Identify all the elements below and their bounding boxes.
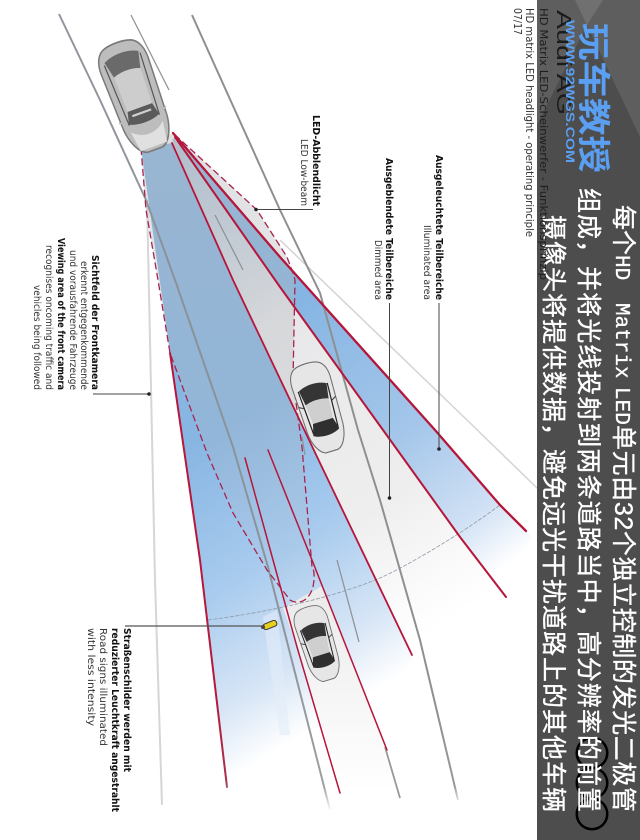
road line: left edge: [59, 14, 330, 810]
caption line 1: LED: [609, 387, 632, 425]
callout: front camera viewing area: vehicles being followed: [31, 285, 42, 390]
decorative top triangle: [575, 0, 603, 25]
range arc: [208, 505, 500, 620]
beam: pale stripe behind road sign: [263, 610, 290, 735]
header: date: 07/17: [511, 8, 523, 35]
callout: front camera viewing area: Viewing area of the front camera: [55, 238, 66, 390]
red line: upper illuminated edge: [173, 133, 526, 531]
caption line 1: 单元由32个独立控制的发光二极管: [609, 425, 637, 812]
callout: road signs: [85, 626, 263, 812]
watermark: 玩车教授: [575, 23, 612, 173]
beam: dimmed area wedge: [172, 137, 510, 658]
road line: right edge: [192, 15, 458, 800]
panel: dark caption band: [537, 0, 640, 840]
red beam lines: [170, 133, 526, 793]
icon: road sign: [261, 620, 278, 630]
callout: front camera viewing area: und vorausfahrende Fahrzeuge: [67, 250, 78, 390]
decorative lighter corner: [537, 0, 640, 137]
beam: dimmed white area around third car: [283, 586, 400, 800]
road line: outer light gray left: [147, 200, 162, 805]
header: English title: HD matrix LED headlight - operating principle: [523, 8, 535, 237]
beam: upper blue wedge: [175, 135, 532, 602]
road line: outer light gray right: [280, 240, 537, 488]
road line: car lane end: [385, 747, 400, 798]
circled marks: [577, 738, 607, 829]
callout: road signs: with less intensity: [85, 628, 96, 727]
caption line 3: 摄像头将提供数据，避免远光干扰道路上的其他车辆: [539, 215, 567, 812]
road line: centre dashes: [131, 15, 359, 642]
road diagram: [59, 14, 537, 810]
red line: car edge b: [268, 450, 387, 750]
car: oncoming vehicle: [286, 358, 351, 457]
red line: left edge: [170, 353, 227, 787]
callout: road signs: reduzierter Leuchtkraft angestrahlt: [109, 628, 120, 812]
callout: LED low-beam: LED Low-beam: [298, 139, 309, 206]
low-beam dashed outline: [141, 133, 314, 602]
callout: illuminated area: Ausgeleuchtete Teilbereiche: [433, 155, 444, 300]
callout: dimmed area: [372, 158, 394, 500]
caption line 1: [609, 205, 637, 812]
red line: lower illuminated edge: [175, 137, 506, 597]
callout: LED low-beam: [254, 115, 321, 211]
red line: car edge a: [245, 458, 340, 793]
callout: illuminated area: Illuminated area: [421, 225, 432, 300]
callout: LED low-beam: LED-Abblendlicht: [310, 115, 321, 207]
caption line 1: 每个: [609, 205, 637, 255]
callout: front camera viewing area: Sichtfeld der Frontkamera: [89, 255, 100, 390]
car: own vehicle: [93, 34, 179, 158]
caption line 1: Matrix: [609, 303, 632, 379]
callout: road signs: Straßenschilder werden mit: [121, 628, 132, 772]
red line: dimmed edge: [172, 143, 412, 655]
callout: road signs: Road signs illuminated: [97, 628, 108, 746]
callout: dimmed area: Dimmed area: [372, 240, 383, 300]
car: preceding vehicle: [290, 602, 345, 685]
header: German title: HD Matrix LED-Scheinwerfer - Funktionsprinzip: [537, 8, 549, 280]
callout: illuminated area: [421, 155, 444, 451]
callout: front camera viewing area: [31, 238, 151, 396]
caption line 1: HD: [609, 255, 632, 280]
callout: front camera viewing area: recognises oncoming traffic and: [43, 245, 54, 390]
beam: low-beam area: [141, 133, 314, 602]
callout: dimmed area: Ausgeblendete Teilbereiche: [383, 158, 394, 300]
beam: left blue wedge: [141, 143, 413, 796]
watermark: WWW.92WGS.COM: [563, 20, 577, 163]
watermark: [563, 20, 612, 173]
header: brand name: Audi AG: [552, 10, 574, 115]
callout: front camera viewing area: erkennt entgegenkommende: [78, 261, 89, 390]
caption line 2: 组成，并将光线投射到两条道路当中，高分辨率的前置: [574, 188, 602, 812]
